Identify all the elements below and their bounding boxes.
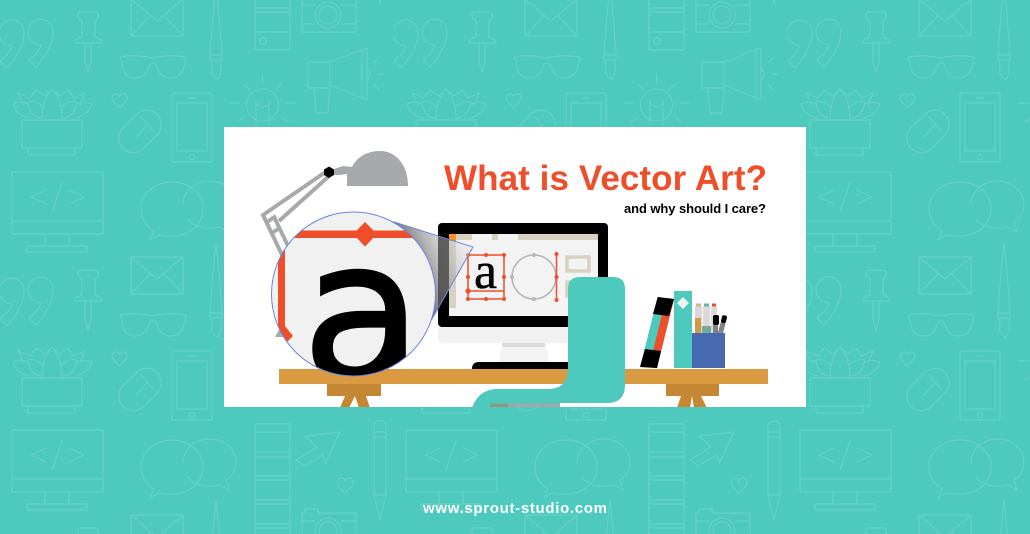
icon: magnifier circle with enlarged letter: a xyxy=(302,199,422,427)
screen: letter a with red vector box xyxy=(465,253,506,301)
screen: red line xyxy=(554,252,558,302)
icon: teal paper sheet xyxy=(472,277,625,408)
desk illustration xyxy=(263,151,768,427)
title: What is Vector Art? xyxy=(444,159,767,198)
icon: pencil cup xyxy=(692,304,727,368)
icon: desk lamp xyxy=(263,151,408,337)
icon: upright book xyxy=(674,291,692,368)
screen toolbar xyxy=(449,234,598,308)
icon: computer monitor xyxy=(438,223,608,369)
subtitle: and why should I care? xyxy=(624,201,766,216)
screen: letter a with red vector box: a xyxy=(474,243,497,300)
icon: magnifier circle with enlarged letter xyxy=(271,212,436,376)
paper shadow strip xyxy=(490,404,560,407)
footer url: www.sprout-studio.com xyxy=(422,500,607,517)
icon: leaning book xyxy=(640,297,674,368)
screen: beige frames xyxy=(567,257,589,296)
icon: magnifier cone xyxy=(394,222,473,319)
white panel xyxy=(224,127,806,407)
screen: grey circle xyxy=(510,253,556,301)
desk xyxy=(279,369,768,408)
